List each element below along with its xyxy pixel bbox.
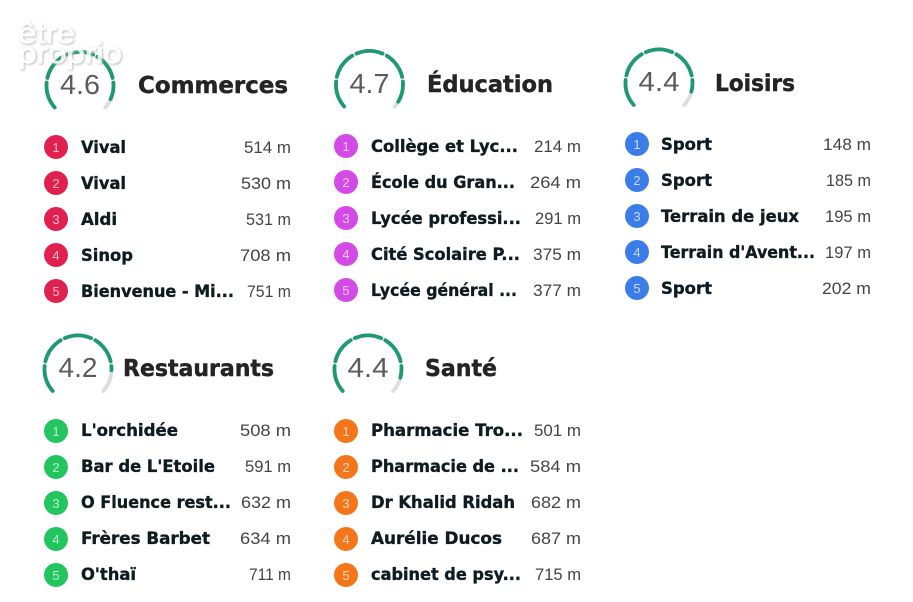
list row 4 — [44, 243, 291, 267]
list row 3: 632 m — [241, 493, 291, 512]
list row 4: 4 — [342, 247, 350, 262]
list row 3: 195 m — [825, 207, 871, 226]
list row 3: 3 — [633, 209, 641, 224]
list row 4: 4 — [52, 532, 60, 547]
list row 2: 2 — [52, 460, 60, 475]
list row 3: Lycée professi... — [371, 209, 521, 228]
list row 1: 1 — [342, 424, 350, 439]
list row 5: Bienvenue - Mi... — [81, 282, 234, 301]
list row 3 — [44, 207, 291, 231]
list row 5 — [44, 563, 291, 587]
heading: Éducation: Éducation — [427, 70, 553, 98]
list row 3 — [334, 206, 581, 230]
gauge: Loisirs 4.4 — [612, 36, 706, 130]
list row 3: Terrain de jeux — [661, 207, 799, 226]
list row 3: 682 m — [531, 493, 581, 512]
list row 5: cabinet de psy... — [371, 565, 521, 584]
list row 5: Lycée général ... — [371, 281, 517, 300]
gauge: Restaurants 4.2 — [31, 322, 125, 416]
list row 5 — [44, 279, 291, 303]
panel: Éducation — [322, 37, 581, 302]
list row 2: 2 — [342, 460, 350, 475]
list row 4: 4 — [342, 532, 350, 547]
list row 3 — [625, 204, 871, 228]
heading: Restaurants: Restaurants — [123, 356, 274, 382]
list row 3: 531 m — [246, 210, 291, 229]
list row 1: Collège et Lyc... — [371, 137, 518, 156]
list row 5 — [334, 278, 581, 302]
list row 5: 377 m — [533, 281, 581, 300]
list row 1: 1 — [52, 140, 60, 155]
list row 2: Vival — [81, 174, 126, 193]
list row 3: 291 m — [535, 209, 581, 228]
list row 2 — [44, 455, 291, 479]
panel: Restaurants — [31, 322, 291, 587]
list row 1 — [625, 132, 871, 156]
list row 3: O Fluence rest... — [81, 493, 231, 512]
list row 4: 687 m — [531, 529, 581, 548]
list row 5: 751 m — [247, 282, 291, 301]
list row 5: 5 — [52, 568, 60, 583]
list row 4: Terrain d'Avent... — [661, 243, 815, 262]
list row 5: 5 — [633, 281, 641, 296]
list row 3: Aldi — [81, 210, 117, 229]
gauge: Commerces 4.6 — [33, 38, 127, 133]
gauge: Éducation 4.7: 4.7 — [350, 68, 390, 99]
list row 2: École du Gran... — [371, 173, 515, 192]
list row 5: 5 — [52, 284, 60, 299]
list row 4: 4 — [52, 248, 60, 263]
list row 3: 3 — [342, 211, 350, 226]
list row 2: 185 m — [826, 171, 871, 190]
list row 2 — [334, 455, 581, 479]
list row 5: 5 — [342, 568, 350, 583]
watermark logo — [18, 18, 122, 70]
heading: Commerces: Commerces — [138, 73, 288, 99]
list row 4: Cité Scolaire P... — [371, 245, 520, 264]
watermark logo: proprio — [18, 38, 122, 70]
list row 2 — [625, 168, 871, 192]
list row 5: 5 — [342, 283, 350, 298]
list row 1: Sport — [661, 135, 712, 154]
list row 4 — [334, 527, 581, 551]
list row 3 — [44, 491, 291, 515]
list row 3: 3 — [342, 496, 350, 511]
list row 2: Bar de L'Etoile — [81, 457, 215, 476]
gauge: Éducation 4.7 — [322, 37, 417, 132]
heading: Loisirs: Loisirs — [715, 71, 795, 97]
gauge: Loisirs 4.4: 4.4 — [638, 66, 680, 97]
list row 5: O'thaï — [81, 565, 136, 584]
list row 2: 2 — [342, 175, 350, 190]
list row 5: Sport — [661, 279, 712, 298]
gauge: Commerces 4.6: 4.6 — [60, 69, 100, 100]
list row 2 — [44, 171, 291, 195]
list row 1: 1 — [52, 424, 60, 439]
list row 2: Pharmacie de ... — [371, 457, 519, 476]
list row 4: 4 — [633, 245, 641, 260]
list row 2: 2 — [633, 173, 641, 188]
list row 3: Dr Khalid Ridah — [371, 493, 515, 512]
list row 2: Sport — [661, 171, 712, 190]
list row 3: 3 — [52, 212, 60, 227]
panel: Loisirs — [612, 36, 871, 300]
list row 2 — [334, 170, 581, 194]
list row 3 — [334, 491, 581, 515]
list row 1: 148 m — [823, 135, 871, 154]
list row 4: 375 m — [533, 245, 581, 264]
list row 2: 584 m — [530, 457, 581, 476]
list row 1: 501 m — [534, 421, 581, 440]
list row 4 — [625, 240, 871, 264]
list row 4: 634 m — [240, 529, 291, 548]
list row 4: Frères Barbet — [81, 529, 210, 548]
list row 4 — [334, 242, 581, 266]
list row 2: 264 m — [530, 173, 581, 192]
list row 1: 1 — [342, 139, 350, 154]
list row 2: 591 m — [245, 457, 291, 476]
list row 5 — [625, 276, 871, 300]
list row 5: 711 m — [249, 565, 291, 584]
list row 1: 1 — [633, 137, 641, 152]
list row 2: 2 — [52, 176, 60, 191]
list row 1: 214 m — [534, 137, 581, 156]
gauge: Santé 4.4: 4.4 — [348, 352, 388, 383]
list row 5: 202 m — [822, 279, 871, 298]
panel: Santé — [321, 322, 581, 587]
list row 5: 715 m — [535, 565, 581, 584]
list row 4 — [44, 527, 291, 551]
list row 1 — [334, 134, 581, 158]
list row 2: 530 m — [241, 174, 291, 193]
list row 3: 3 — [52, 496, 60, 511]
heading: Santé: Santé — [425, 356, 497, 382]
list row 1: Vival — [81, 138, 126, 157]
list row 1: 508 m — [240, 421, 291, 440]
list row 1 — [44, 419, 291, 443]
panel: Commerces — [33, 38, 291, 303]
list row 1: L'orchidée — [81, 421, 178, 440]
list row 4: Sinop — [81, 246, 133, 265]
list row 4: 197 m — [825, 243, 871, 262]
list row 1: Pharmacie Tro... — [371, 421, 523, 440]
gauge: Santé 4.4 — [321, 322, 415, 416]
list row 4: Aurélie Ducos — [371, 529, 502, 548]
watermark logo: être — [18, 18, 75, 50]
list row 1 — [44, 135, 291, 159]
list row 1: 514 m — [244, 138, 291, 157]
gauge: Restaurants 4.2: 4.2 — [58, 352, 98, 383]
list row 4: 708 m — [240, 246, 291, 265]
list row 5 — [334, 563, 581, 587]
list row 1 — [334, 419, 581, 443]
